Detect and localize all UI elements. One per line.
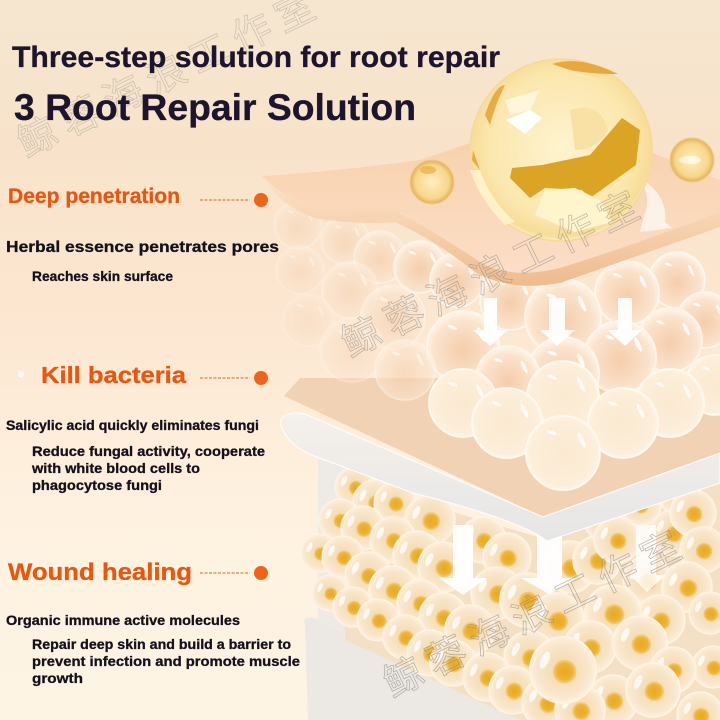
illustration: upper bubble layer (274, 201, 720, 490)
illustration: golden capsule layer (301, 467, 720, 720)
section: wound healing: growth (32, 670, 83, 686)
illustration: upper white arrows (473, 298, 642, 346)
section: deep penetration: Reaches skin surface (32, 268, 173, 284)
watermark: bottom: 鲸蓉海浪工作室 (377, 525, 688, 706)
illustration: glass slab layer (280, 413, 720, 541)
section: deep penetration: Herbal essence penetrates pores (6, 239, 279, 256)
section: deep penetration (6, 185, 279, 284)
section: wound healing: prevent infection and promote muscle (32, 653, 300, 669)
section: wound healing (6, 559, 300, 686)
section: kill bacteria: phagocytose fungi (32, 477, 162, 493)
illustration: top skin layer (262, 143, 720, 281)
section: wound healing: Wound healing (8, 559, 192, 586)
section: kill bacteria: with white blood cells to (31, 460, 200, 476)
section: deep penetration: Deep penetration (8, 185, 180, 208)
section: kill bacteria: Kill bacteria (41, 362, 186, 388)
section: wound healing: Repair deep skin and build a barrier to (32, 636, 291, 652)
illustration: capsule backing (345, 480, 720, 720)
title: english line two: 3 Root Repair Solution (14, 87, 416, 128)
section: kill bacteria: Salicylic acid quickly eliminates fungi (6, 417, 259, 433)
title: english line one: Three-step solution for root repair (12, 41, 500, 74)
section: kill bacteria (6, 362, 268, 493)
section: kill bacteria: Reduce fungal activity, cooperate (32, 443, 265, 459)
icon: large white swirl arrow behind sphere (640, 178, 672, 232)
icon: small right droplet (670, 138, 714, 182)
illustration: peach dotted slab (284, 378, 720, 518)
section: wound healing: Organic immune active molecules (6, 612, 240, 628)
watermark: middle: 鲸蓉海浪工作室 (335, 185, 646, 366)
illustration: large golden sphere (470, 59, 652, 241)
illustration: lower white arrows (439, 520, 666, 595)
illustration: glass column back wall (318, 450, 360, 640)
illustration: bottom fabric layer (304, 618, 545, 720)
icon: small left droplet (410, 160, 454, 204)
